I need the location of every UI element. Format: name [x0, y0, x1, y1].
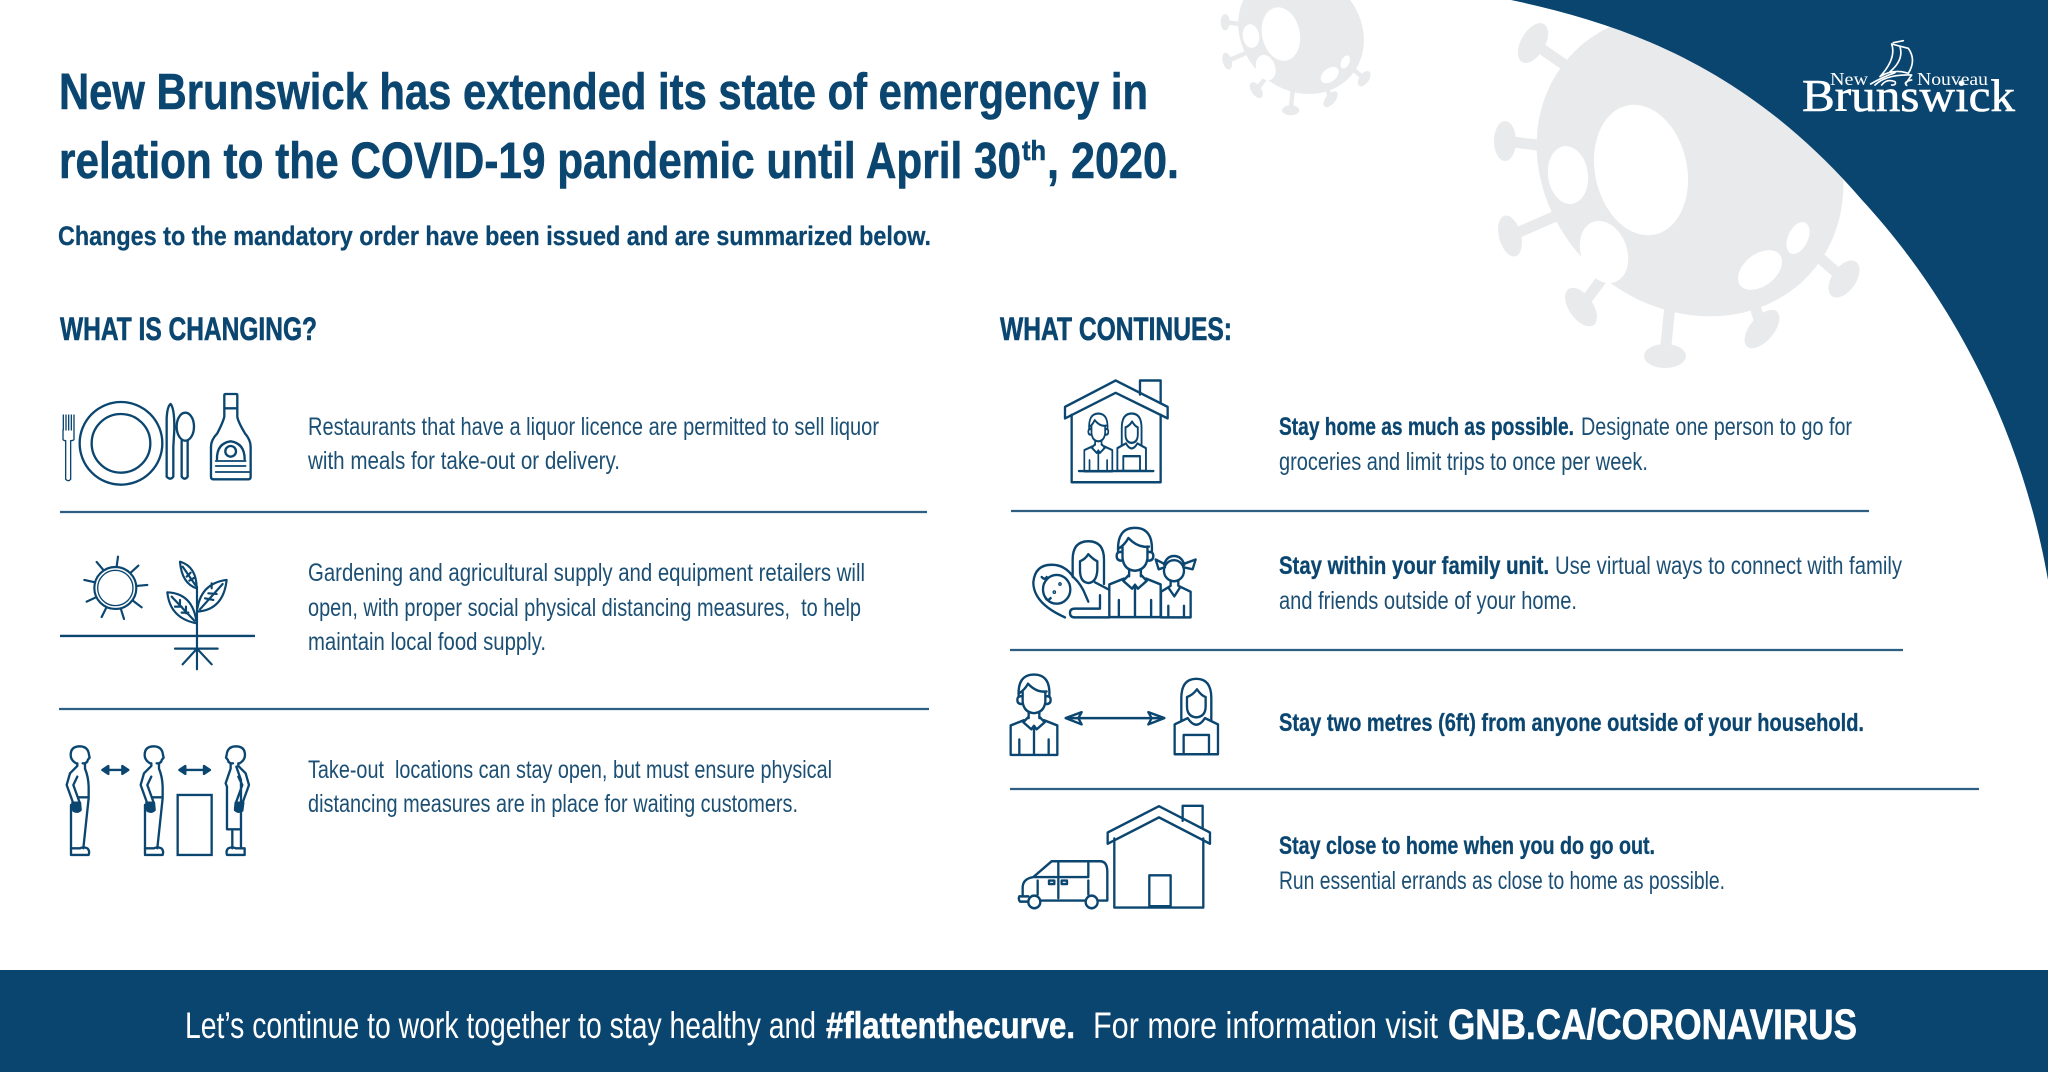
text: gardening: [308, 559, 865, 656]
text: stay home: Designate one person to go for: [1581, 413, 1852, 441]
text: family unit: and friends outside of your home.: [1279, 587, 1577, 615]
icon: two metres apart: [1011, 675, 1218, 755]
title: , 2020.: [1047, 132, 1179, 189]
footer banner: GNB.CA/CORONAVIRUS: [1448, 1001, 1857, 1049]
text: restaurants: [307, 413, 879, 475]
footer banner: Let’s continue to work together to stay healthy and: [185, 1005, 816, 1046]
subtitle: Changes to the mandatory order have been issued and are summarized below.: [58, 221, 931, 251]
footer banner: #flattenthecurve.: [826, 1005, 1075, 1046]
text: stay close: [1279, 832, 1725, 895]
text: restaurants: Restaurants that have a liquor licence are permitted to sell liquor: [308, 413, 879, 441]
logo: New Brunswick: [1802, 41, 2015, 121]
text: restaurants: with meals for take-out or delivery.: [307, 447, 620, 475]
icon: people distancing in line: [67, 746, 249, 855]
title: [59, 63, 1179, 189]
text: stay home: groceries and limit trips to once per week.: [1279, 448, 1648, 476]
text: take-out: Take-out locations can stay open, but must ensure physical: [308, 756, 832, 784]
title: relation to the COVID-19 pandemic until April 30: [59, 132, 1021, 189]
text: family unit: Stay within your family unit.: [1279, 552, 1549, 580]
icon: sun and plant: [60, 557, 255, 669]
icon: van and house: [1019, 806, 1210, 908]
text: stay home: Stay home as much as possible.: [1279, 413, 1574, 441]
text: two metres: Stay two metres (6ft) from anyone outside of your household.: [1279, 709, 1864, 737]
text: gardening: open, with proper social physical distancing measures, to help: [308, 594, 861, 622]
icon: family: [1033, 528, 1196, 617]
text: stay close: Run essential errands as close to home as possible.: [1279, 867, 1725, 895]
text: take-out: distancing measures are in place for waiting customers.: [308, 790, 798, 818]
logo: New Brunswick: Nouveau: [1917, 69, 1988, 89]
background virus: large: [1475, 0, 1905, 379]
title: New Brunswick has extended its state of emergency in: [59, 63, 1148, 120]
corner panel: dark blue curve: [1511, 0, 2048, 580]
text: gardening: maintain local food supply.: [308, 628, 546, 656]
icon: plate, cutlery and bottle: [63, 394, 251, 485]
text: gardening: Gardening and agricultural supply and equipment retailers will: [308, 559, 865, 587]
title: th: [1022, 135, 1046, 166]
logo: New Brunswick: Brunswick: [1802, 70, 2015, 121]
text: take-out: [308, 756, 832, 818]
heading: what continues: WHAT CONTINUES:: [1000, 311, 1232, 347]
text: family unit: [1279, 552, 1902, 615]
footer banner: For more information visit: [1093, 1005, 1439, 1046]
logo: New Brunswick: New: [1830, 69, 1868, 89]
text: family unit: Use virtual ways to connect with family: [1555, 552, 1902, 580]
icon: couple at home: [1065, 381, 1168, 482]
text: stay close: Stay close to home when you do go out.: [1279, 832, 1655, 860]
text: stay home: [1279, 413, 1852, 476]
background virus: small: [1213, 0, 1389, 120]
heading: what is changing: WHAT IS CHANGING?: [60, 311, 317, 347]
footer banner: [0, 970, 2048, 1072]
